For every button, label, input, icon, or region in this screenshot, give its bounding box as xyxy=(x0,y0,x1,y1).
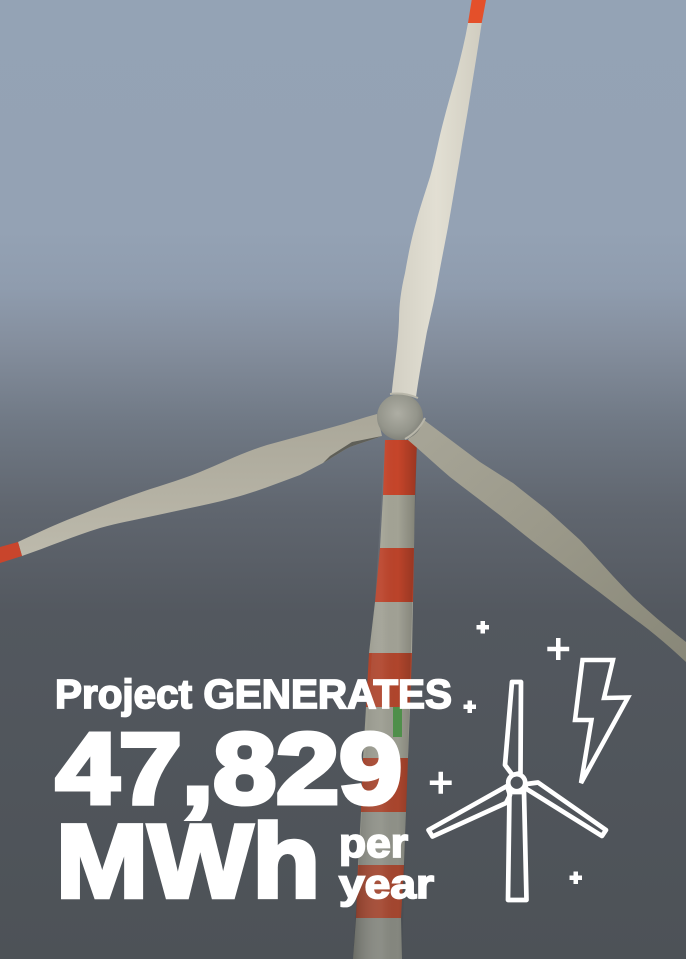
unit: MWh: MWh xyxy=(56,804,320,920)
turbine blade: right xyxy=(408,417,686,662)
turbine tower xyxy=(353,440,417,959)
turbine blade: left xyxy=(0,414,382,563)
figure: 47,829: 47,829 xyxy=(56,713,402,825)
label: year: year xyxy=(339,861,434,907)
label: per: per xyxy=(339,820,408,866)
heading: Project GENERATES: Project GENERATES xyxy=(55,671,452,717)
icon: lightning bolt xyxy=(575,660,628,783)
icon: sparkle plus signs xyxy=(430,621,582,884)
turbine blade: upper xyxy=(392,0,486,397)
turbine hub xyxy=(377,394,425,440)
icon: wind turbine outline xyxy=(428,682,606,900)
